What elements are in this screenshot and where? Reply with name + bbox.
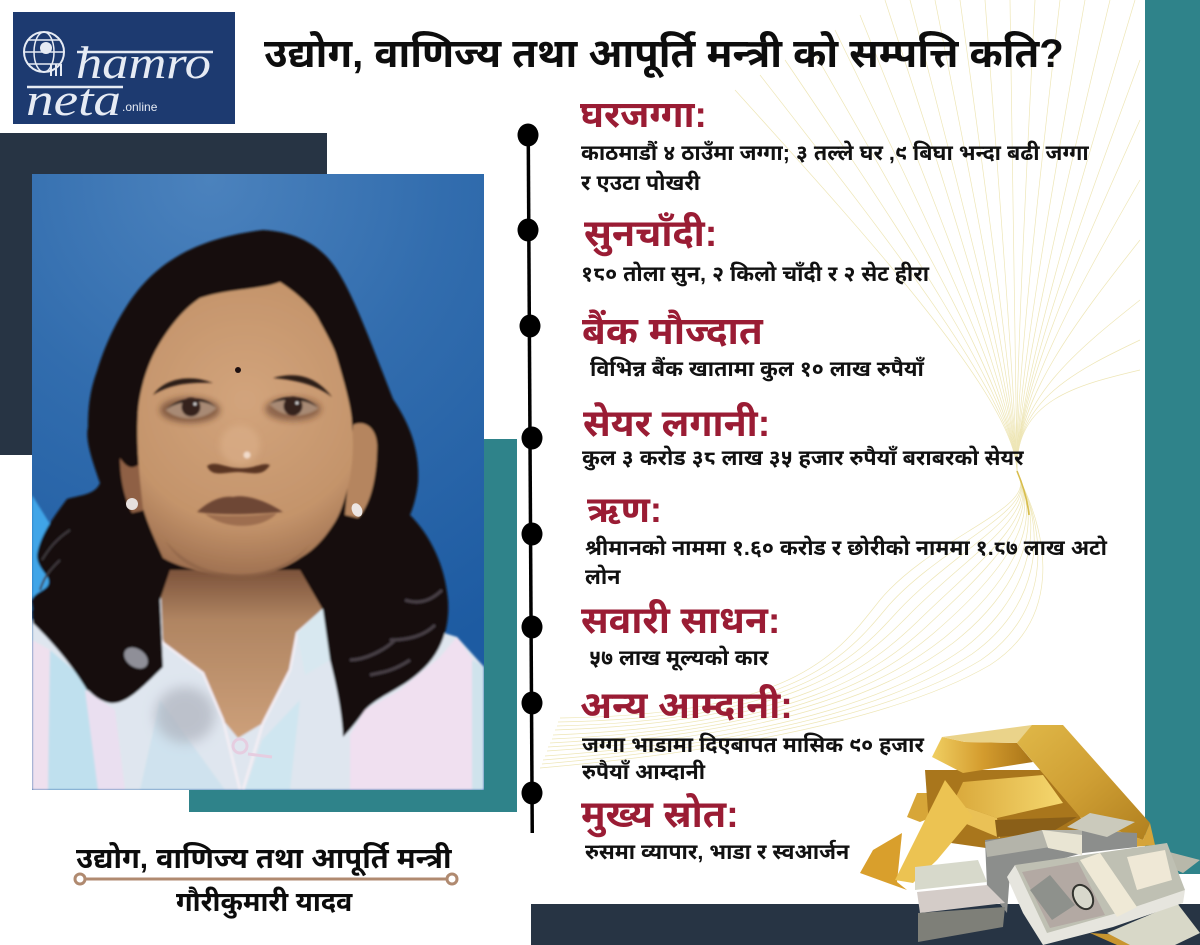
loans text: लोन [585,565,620,589]
section: vehicles: सवारी साधन: [581,599,780,641]
logo: hamro [76,37,211,88]
right earring [350,502,364,518]
land and house text [581,140,1089,195]
bank balance text: विभिन्न बैंक खातामा कुल १० लाख रुपैयाँ [590,357,924,381]
other income text [582,732,924,784]
caption: minister name: गौरीकुमारी यादव [176,887,352,917]
section: bank balance: बैंक मौज्दात [582,310,763,353]
loans text: श्रीमानको नाममा १.६० करोड र छोरीको नाममा १.८७ लाख अटो [585,536,1107,560]
title: उद्योग, वाणिज्य तथा आपूर्ति मन्त्री को सम्पत्ति कति? [264,32,1064,76]
section: other income: अन्य आम्दानी: [580,684,793,726]
shares text: कुल ३ करोड ३८ लाख ३५ हजार रुपैयाँ बराबरको सेयर [582,446,1024,470]
gold and silver text: १८० तोला सुन, २ किलो चाँदी र २ सेट हीरा [581,262,929,286]
other income text: जग्गा भाडामा दिएबापत मासिक ९० हजार [582,733,924,757]
shirt knot button [233,739,272,757]
bindi [235,367,241,373]
logo [13,12,235,124]
section: loans: ऋण: [587,489,662,530]
section: shares: सेयर लगानी: [583,402,770,444]
portrait photo [32,174,484,790]
vehicles text: ५७ लाख मूल्यको कार [589,646,768,670]
caption: minister title: उद्योग, वाणिज्य तथा आपूर्ति मन्त्री [76,843,452,875]
section: gold and silver: सुनचाँदी: [584,213,717,255]
other income text: रुपैयाँ आम्दानी [582,760,705,784]
land and house text: र एउटा पोखरी [581,171,700,195]
section: land and house: घरजग्गा: [580,94,707,135]
logo: .online [122,100,158,114]
logo: neta [26,74,121,124]
left earring [126,498,138,510]
facial features [153,375,332,578]
main source text: रुसमा व्यापार, भाडा र स्वआर्जन [585,840,849,864]
section: main source: मुख्य स्रोत: [581,794,739,836]
land and house text: काठमाडौं ४ ठाउँमा जग्गा; ३ तल्ले घर ,९ बिघा भन्दा बढी जग्गा [581,141,1089,165]
loans text [585,536,1108,589]
